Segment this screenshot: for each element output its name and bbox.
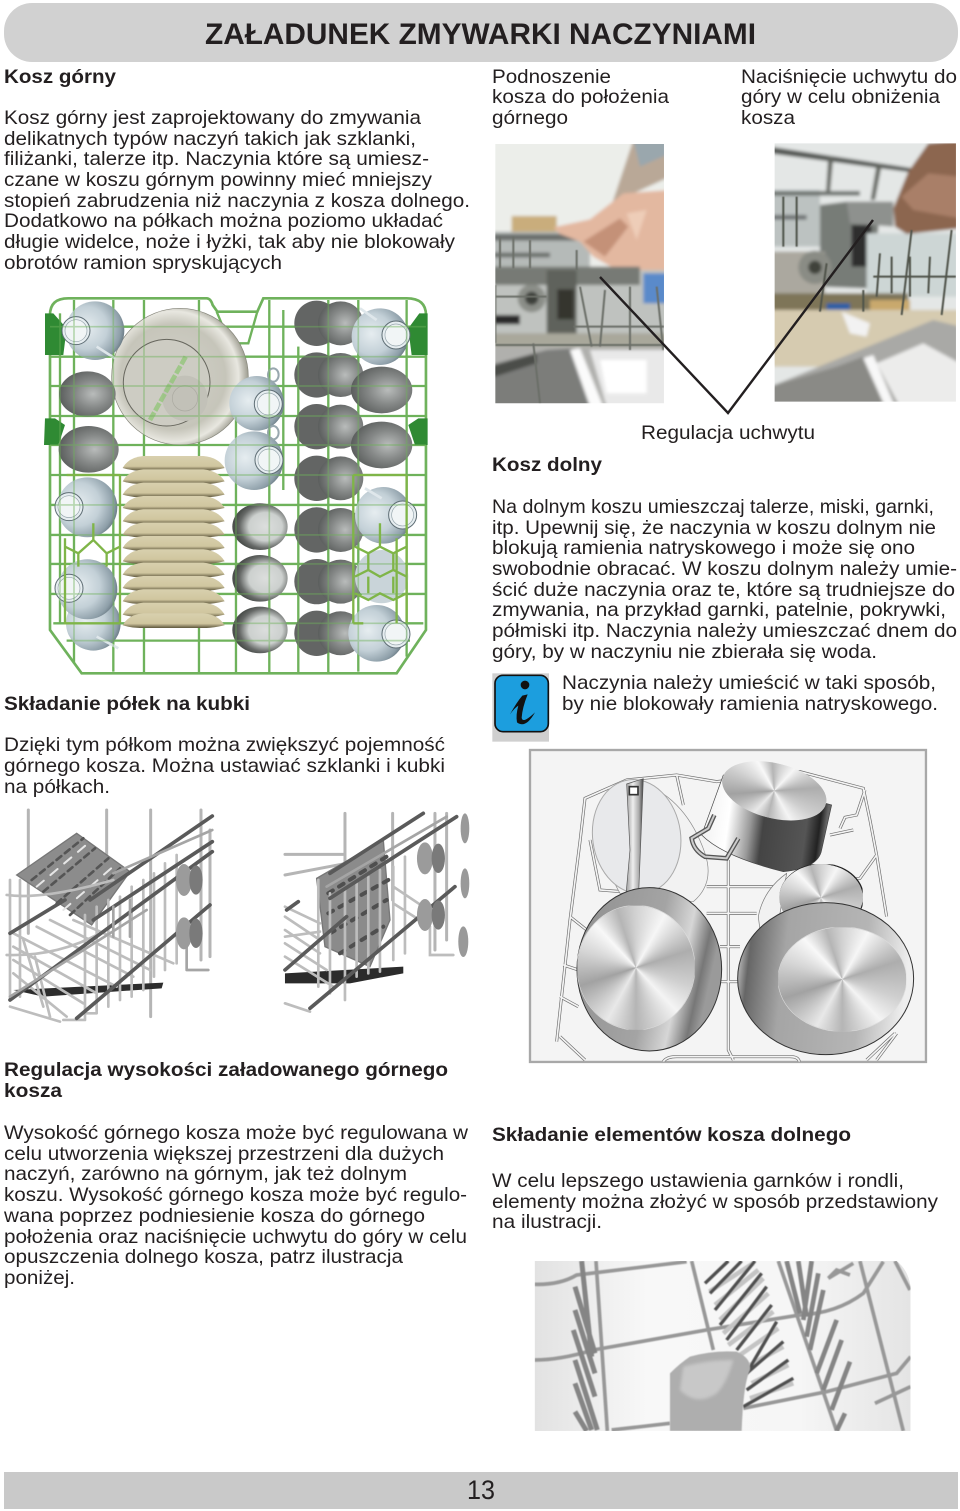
text block: upper basket: długie widelce, noże i łyżki, tak aby nie blokowały <box>4 231 455 253</box>
text block: lower basket: Na dolnym koszu umieszczaj talerze, miski, garnki, <box>492 496 934 518</box>
text block: folding elements: na ilustracji. <box>492 1211 602 1233</box>
text block: lower basket <box>492 496 957 663</box>
text block: upper basket: delikatnych typów naczyń takich jak szklanki, <box>4 128 416 150</box>
photo: folding tines by hand <box>535 1261 911 1431</box>
text block: cup shelves: na półkach. <box>4 776 110 798</box>
caption: raising the basket <box>492 66 669 129</box>
clips <box>44 313 428 445</box>
heading: lower basket: Kosz dolny <box>492 454 602 476</box>
text block: lower basket: zmywania, na przykład garnki, patelnie, pokrywki, <box>492 599 946 621</box>
pot with handles <box>692 751 833 872</box>
large pan left <box>577 888 722 1051</box>
text block: upper basket: czane w koszu górnym powinny mieć mniejszy <box>4 169 432 191</box>
caption: raising the basket: Podnoszenie <box>492 66 611 88</box>
text block: lower basket: ścić duże naczynia oraz te, które są trudniejsze do <box>492 579 955 601</box>
caption: pressing the handle <box>741 66 957 129</box>
text block: lower basket: góry, by w naczyniu nie zbierała się woda. <box>492 641 877 663</box>
text block: upper basket <box>4 66 470 274</box>
icon: information <box>492 673 549 742</box>
text block: height adjustment: Wysokość górnego kosza może być regulowana w <box>4 1122 469 1144</box>
title banner <box>4 3 958 62</box>
photo: raising basket handle <box>490 140 670 407</box>
callout: info note <box>562 672 938 715</box>
page number: 13 <box>467 1475 495 1505</box>
text block: upper basket: Kosz górny <box>4 66 116 88</box>
text block: cup shelves <box>4 734 445 798</box>
caption: raising the basket: górnego <box>492 107 568 129</box>
text block: upper basket: obrotów ramion spryskujących <box>4 252 282 274</box>
heading: cup shelves folding: Składanie półek na kubki <box>4 693 250 715</box>
illustration: fold-down shelf open <box>7 810 212 1022</box>
text block: upper basket: Kosz górny jest zaprojektowany do zmywania <box>4 107 421 129</box>
text block: height adjustment: opuszczenia dolnego kosza, patrz ilustracja <box>4 1246 403 1268</box>
stack of plates <box>123 456 225 628</box>
frying pan lid and handle <box>585 774 708 902</box>
rack wires behind dishes <box>50 298 426 673</box>
large pan right <box>738 903 914 1055</box>
arrow: lines pointing at the handle <box>600 220 873 413</box>
heading: folding lower basket elements: Składanie elementów kosza dolnego <box>492 1124 851 1146</box>
cups: left column <box>55 301 124 651</box>
lower rack wires <box>557 772 897 1062</box>
text block: folding elements: elementy można złożyć w sposób przedstawiony <box>492 1191 938 1213</box>
callout: info note: Naczynia należy umieścić w taki sposób, <box>562 672 936 694</box>
text block: folding elements <box>492 1170 938 1233</box>
cups: centre column <box>225 368 288 653</box>
text block: upper basket: stopień zabrudzenia niż naczynia z kosza dolnego. <box>4 190 470 212</box>
footer bar <box>4 1472 958 1509</box>
text block: upper basket: Dodatkowo na półkach można poziomo układać <box>4 210 443 232</box>
illustration: fold-down shelf closed <box>285 813 469 1012</box>
text block: height adjustment: koszu. Wysokość górnego kosza może być regulo- <box>4 1184 467 1206</box>
heading: upper basket height adjustment: Regulacja wysokości załadowanego górnego <box>4 1059 448 1081</box>
caption: pressing the handle: góry w celu obniżenia <box>741 86 940 108</box>
text block: upper basket: filiżanki, talerze itp. Naczynia które są umiesz- <box>4 148 429 170</box>
callout: info note: by nie blokowały ramienia natryskowego. <box>562 693 938 715</box>
heading: upper basket height adjustment <box>4 1059 448 1102</box>
text block: lower basket: blokują ramienia natryskowego i może się ono <box>492 537 915 559</box>
caption: pressing the handle: Naciśnięcie uchwytu do <box>741 66 957 88</box>
fold-down cup shelves <box>65 475 407 623</box>
text block: lower basket: półmiski itp. Naczynia należy umieszczać dnem do <box>492 620 957 642</box>
text block: height adjustment: celu utworzenia większej przestrzeni dla dużych <box>4 1143 444 1165</box>
text block: lower basket: swobodnie obracać. W koszu dolnym należy umie- <box>492 558 957 580</box>
text block: height adjustment <box>3 1122 469 1289</box>
illustration: pots and pans in lower basket <box>530 750 926 1062</box>
green wires showing through the dishes <box>50 300 426 673</box>
text block: cup shelves: górnego kosza. Można ustawiać szklanki i kubki <box>4 755 445 777</box>
text block: height adjustment: naczyń, zarówno na górnym, jak też dolnym <box>4 1163 407 1185</box>
text block: cup shelves: Dzięki tym półkom można zwiększyć pojemność <box>4 734 445 756</box>
small pan <box>758 864 863 931</box>
heading: upper basket height adjustment: kosza <box>4 1080 62 1102</box>
text block: height adjustment: położenia oraz naciśnięcie uchwytu do góry w celu <box>4 1226 467 1248</box>
illustration: upper basket load (green rack) <box>44 298 428 673</box>
large bowl <box>112 308 248 445</box>
label: handle adjustment: Regulacja uchwytu <box>641 422 815 444</box>
text block: height adjustment: poniżej. <box>4 1267 75 1289</box>
cups: right double columns <box>294 301 417 662</box>
title: ZAŁADUNEK ZMYWARKI NACZYNIAMI <box>205 18 756 51</box>
caption: raising the basket: kosza do położenia <box>492 86 669 108</box>
text block: lower basket: itp. Upewnij się, że naczynia w koszu dolnym nie <box>492 517 936 539</box>
caption: pressing the handle: kosza <box>741 107 795 129</box>
photo: pressing handle upward <box>770 140 960 407</box>
text block: height adjustment: wana poprzez podniesienie kosza do górnego <box>3 1205 425 1227</box>
text block: folding elements: W celu lepszego ustawienia garnków i rondli, <box>492 1170 904 1192</box>
